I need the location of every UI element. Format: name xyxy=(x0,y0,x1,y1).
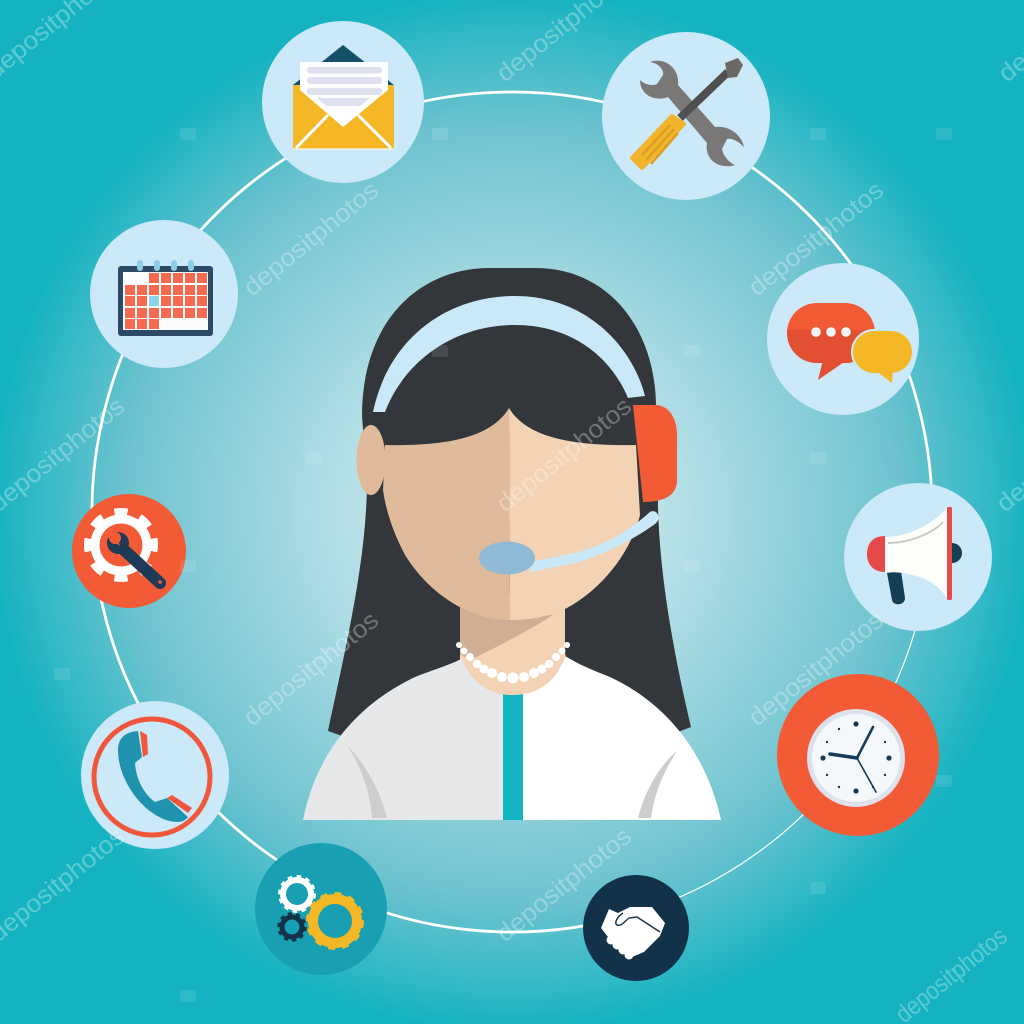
watermark: depositphotos xyxy=(238,176,384,302)
icon: phone xyxy=(81,701,229,849)
icon: chat bubbles xyxy=(767,263,919,415)
headband xyxy=(373,296,645,412)
blouse xyxy=(303,656,721,820)
icon: handshake xyxy=(583,875,689,981)
connecting ring xyxy=(92,92,932,932)
watermark: depositphotos xyxy=(743,176,889,302)
figure: support operator xyxy=(303,268,721,820)
hair xyxy=(328,268,691,737)
icon: gears xyxy=(255,843,387,975)
icon: wrench and screwdriver xyxy=(602,32,770,200)
headset ear cup xyxy=(633,405,677,502)
pearl necklace xyxy=(456,642,570,684)
icon: gear with wrench xyxy=(72,494,186,608)
microphone xyxy=(479,511,659,574)
ear xyxy=(356,425,386,495)
watermark: depositphotos xyxy=(491,392,637,518)
watermark: depositphotos xyxy=(238,606,384,732)
face xyxy=(383,408,640,620)
icon: megaphone xyxy=(844,483,992,631)
icon: calendar xyxy=(90,220,238,368)
neck xyxy=(460,595,565,685)
watermark: depositphotos xyxy=(743,606,889,732)
icon: clock xyxy=(777,674,939,836)
neckline skin xyxy=(460,654,566,695)
watermark: depositphotos xyxy=(491,822,637,948)
icon: envelope xyxy=(262,21,424,183)
